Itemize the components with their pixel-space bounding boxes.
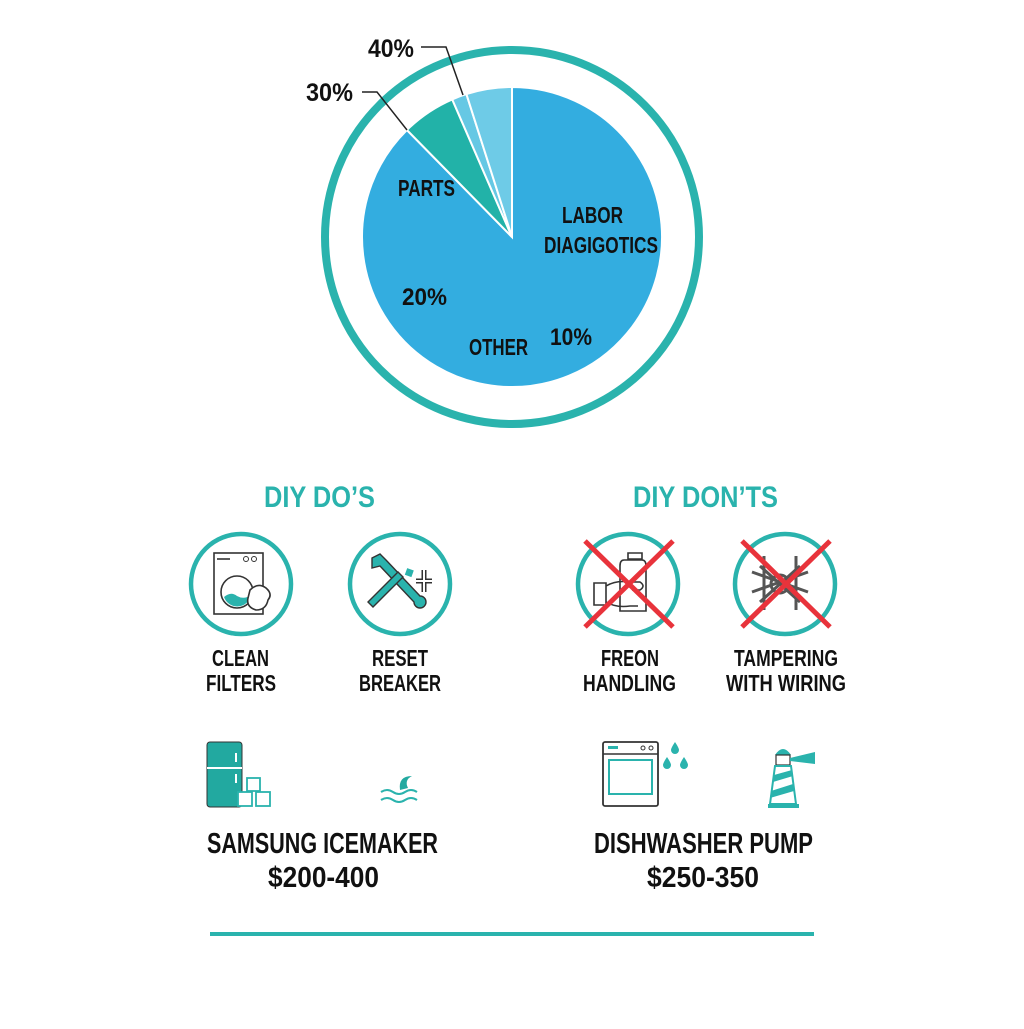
text: BREAKER <box>359 670 441 696</box>
pie chart: LABOR <box>562 202 623 228</box>
heading: DIY DON'TS: DIY DON’TS <box>633 481 778 514</box>
icon: reset breaker <box>350 534 450 634</box>
icon: clean filters <box>191 534 291 634</box>
icon: lighthouse <box>768 749 815 808</box>
pie chart: 20% <box>402 284 447 311</box>
text: dishwasher pump price: DISHWASHER PUMP <box>594 828 813 860</box>
text: HANDLING <box>583 670 676 696</box>
slice: light thin <box>452 94 512 237</box>
pie chart: DIAGIGOTICS <box>544 232 658 258</box>
pie chart: OTHER <box>469 334 528 360</box>
label: reset breaker: RESET <box>372 645 428 671</box>
icon: fridge with ice <box>207 742 270 807</box>
label: clean filters: CLEAN <box>212 645 269 671</box>
text: $200-400 <box>268 862 379 894</box>
icon: freon handling (crossed) <box>578 534 678 634</box>
icon: tampering with wiring (crossed) <box>735 534 835 634</box>
text: $250-350 <box>647 862 759 894</box>
text: FILTERS <box>206 670 276 696</box>
pie chart: PARTS <box>398 175 455 201</box>
pie chart <box>306 35 699 424</box>
pie chart: 40% <box>368 35 414 63</box>
pie chart: 10% <box>550 324 592 351</box>
pie labels: 30% <box>306 79 353 107</box>
outer ring <box>325 50 699 424</box>
text: Samsung icemaker price: SAMSUNG ICEMAKER <box>207 828 438 860</box>
slice: main blue <box>362 87 662 387</box>
text: WITH WIRING <box>726 670 846 696</box>
heading: DIY DO'S: DIY DO’S <box>264 481 375 514</box>
label: tampering with wiring: TAMPERING <box>734 645 838 671</box>
slice: teal <box>407 99 512 237</box>
label: freon handling: FREON <box>601 645 659 671</box>
icon: wave <box>381 776 417 802</box>
leader lines <box>362 92 407 130</box>
slice: light blue <box>466 87 512 237</box>
icon: dishwasher with drops <box>603 742 688 806</box>
